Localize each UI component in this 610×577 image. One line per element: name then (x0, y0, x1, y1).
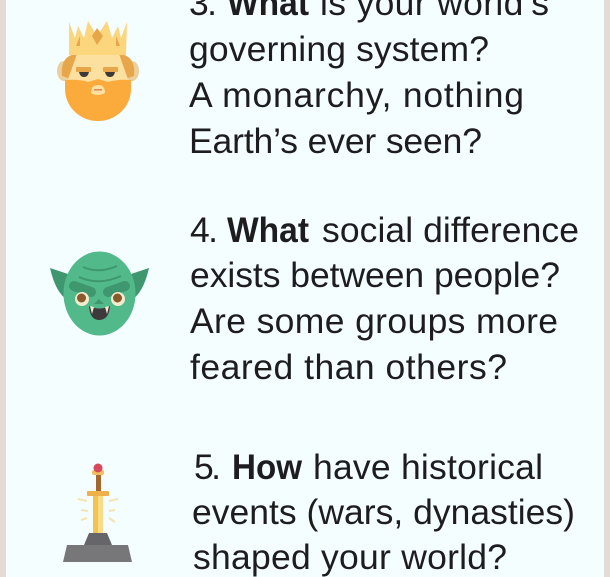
text: question 5 (192, 447, 575, 577)
text: question 5: shaped your world? (193, 537, 507, 577)
text: question 4: feared than others? (190, 347, 507, 387)
text: question 3 (189, 0, 549, 161)
text: question 4: exists between people? (190, 255, 560, 295)
icon: king with crown (57, 21, 139, 121)
text: question 5: 5. (194, 447, 221, 487)
text: question 4: 4. (190, 210, 218, 250)
text: question 3: governing system? (189, 29, 489, 69)
text: question 5: How (232, 447, 302, 487)
text: question 3: A monarchy, nothing (189, 75, 524, 115)
text: question 4: Are some groups more (190, 301, 558, 341)
icon: sword in the stone (63, 464, 132, 562)
text: question 4: What (227, 210, 309, 250)
text: question 3: Earth’s ever seen? (189, 121, 482, 161)
text: question 4 (190, 210, 579, 387)
text: question 5: events (wars, dynasties) (192, 492, 575, 532)
text: question 4: social difference (322, 210, 579, 250)
text: question 5: have historical (313, 447, 543, 487)
icon: green goblin (50, 252, 149, 336)
